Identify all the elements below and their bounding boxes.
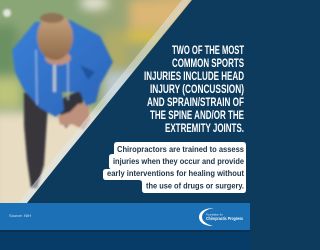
- callout: chiropractors: the use of drugs or surgery.: [146, 182, 244, 190]
- runner hair: [37, 14, 73, 60]
- diagonal light stripe: [18, 0, 191, 203]
- footer: [0, 230, 250, 250]
- runner face: [45, 51, 71, 65]
- callout: chiropractors: Chiropractors are trained to assess: [117, 145, 245, 154]
- bottom band: [0, 203, 250, 230]
- logo: Foundation for Chiropractic Progress: [199, 208, 244, 226]
- runner arm and hand: [58, 103, 90, 130]
- runner legs: [24, 92, 48, 188]
- logo: Foundation for Chiropractic Progress: Chiropractic Progress: [206, 216, 244, 221]
- photo: injured runner holding knee: [0, 0, 250, 212]
- callout: chiropractors: [103, 142, 246, 193]
- logo: Foundation for Chiropractic Progress: Foundation for: [206, 212, 223, 216]
- heading: [144, 45, 244, 135]
- navy panel: [0, 0, 250, 250]
- callout: chiropractors: early interventions for healing without: [107, 169, 244, 178]
- source text: Source: NIH: [9, 213, 31, 218]
- runner jacket: [12, 20, 113, 117]
